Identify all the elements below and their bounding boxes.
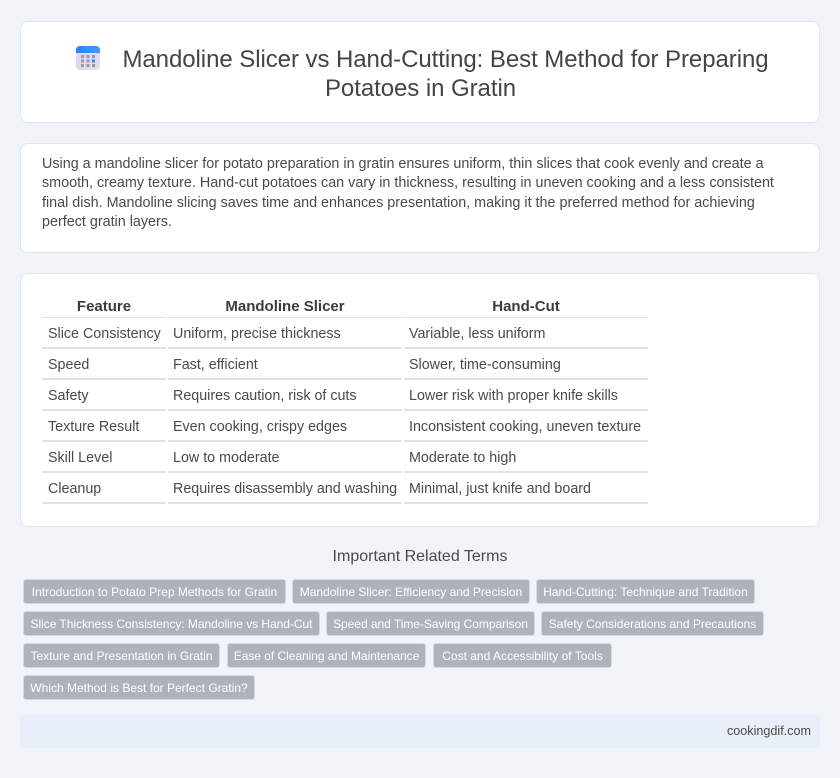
- row: skill level: Moderate to high: [409, 450, 516, 466]
- tag: Slice Thickness Consistency: Mandoline vs Hand-Cut: [31, 617, 312, 631]
- tag: [433, 643, 612, 668]
- panel: comparison table: [20, 273, 820, 527]
- intro text: perfect gratin layers.: [42, 214, 172, 230]
- row: cleanup: Requires disassembly and washing: [173, 481, 397, 497]
- row: cleanup: Minimal, just knife and board: [409, 481, 591, 497]
- row: texture result: Texture Result: [48, 419, 139, 435]
- tag: Cost and Accessibility of Tools: [442, 649, 603, 663]
- tag: [23, 643, 220, 668]
- tag: [23, 611, 320, 636]
- tag: Speed and Time-Saving Comparison: [333, 617, 528, 631]
- tag list: related terms: [23, 579, 764, 700]
- title: [122, 46, 769, 102]
- title: Potatoes in Gratin: [325, 75, 516, 102]
- row: safety: Lower risk with proper knife skills: [409, 388, 618, 404]
- row: safety: Requires caution, risk of cuts: [173, 388, 357, 404]
- row: slice consistency: Variable, less uniform: [409, 326, 545, 342]
- panel: intro paragraph: [20, 143, 820, 253]
- tag: Texture and Presentation in Gratin: [30, 649, 213, 663]
- icon: calendar: [76, 46, 100, 70]
- title: Mandoline Slicer vs Hand-Cutting: Best Method for Preparing: [122, 46, 769, 73]
- row: skill level: Skill Level: [48, 450, 112, 466]
- footer bar: [20, 714, 820, 748]
- tag: [23, 675, 255, 700]
- tag: Which Method is Best for Perfect Gratin?: [30, 681, 248, 695]
- row: safety: Safety: [48, 388, 89, 404]
- row: texture result: Even cooking, crispy edges: [173, 419, 347, 435]
- row: cleanup: [42, 481, 648, 504]
- row: speed: Slower, time-consuming: [409, 357, 561, 373]
- tag: Hand-Cutting: Technique and Tradition: [543, 585, 748, 599]
- row: safety: [42, 388, 648, 411]
- tag: [292, 579, 530, 604]
- tag: Safety Considerations and Precautions: [549, 617, 756, 631]
- row: slice consistency: Uniform, precise thickness: [173, 326, 341, 342]
- row: speed: Fast, efficient: [173, 357, 258, 373]
- tag: [541, 611, 764, 636]
- table header: [42, 298, 648, 318]
- intro text: [42, 156, 774, 230]
- table header: Mandoline Slicer: [225, 298, 345, 315]
- row: skill level: [42, 450, 648, 473]
- heading: related terms: Important Related Terms: [333, 548, 507, 565]
- row: speed: [42, 357, 648, 380]
- table header: Feature: [77, 298, 131, 315]
- row: slice consistency: Slice Consistency: [48, 326, 161, 342]
- intro text: smooth, creamy texture. Hand-cut potatoes can vary in thickness, resulting in uneven cooking and a less consistent: [42, 175, 774, 191]
- panel: title header: [20, 21, 820, 123]
- row: texture result: [42, 419, 648, 442]
- row: slice consistency: [42, 326, 648, 349]
- row: speed: Speed: [48, 357, 89, 373]
- intro text: Using a mandoline slicer for potato preparation in gratin ensures uniform, thin slices that cook evenly and create a: [42, 156, 764, 172]
- row: cleanup: Cleanup: [48, 481, 101, 497]
- tag: Introduction to Potato Prep Methods for Gratin: [32, 585, 277, 599]
- row: skill level: Low to moderate: [173, 450, 280, 466]
- tag: Mandoline Slicer: Efficiency and Precision: [300, 585, 522, 599]
- tag: [23, 579, 286, 604]
- footer source text: cookingdif.com: [727, 724, 811, 738]
- table header: Hand-Cut: [492, 298, 560, 315]
- tag: [326, 611, 535, 636]
- tag: [227, 643, 426, 668]
- row: texture result: Inconsistent cooking, uneven texture: [409, 419, 641, 435]
- tag: Ease of Cleaning and Maintenance: [234, 649, 419, 663]
- intro text: final dish. Mandoline slicing saves time and enhances presentation, making it the preferred method for achieving: [42, 194, 755, 210]
- tag: [536, 579, 755, 604]
